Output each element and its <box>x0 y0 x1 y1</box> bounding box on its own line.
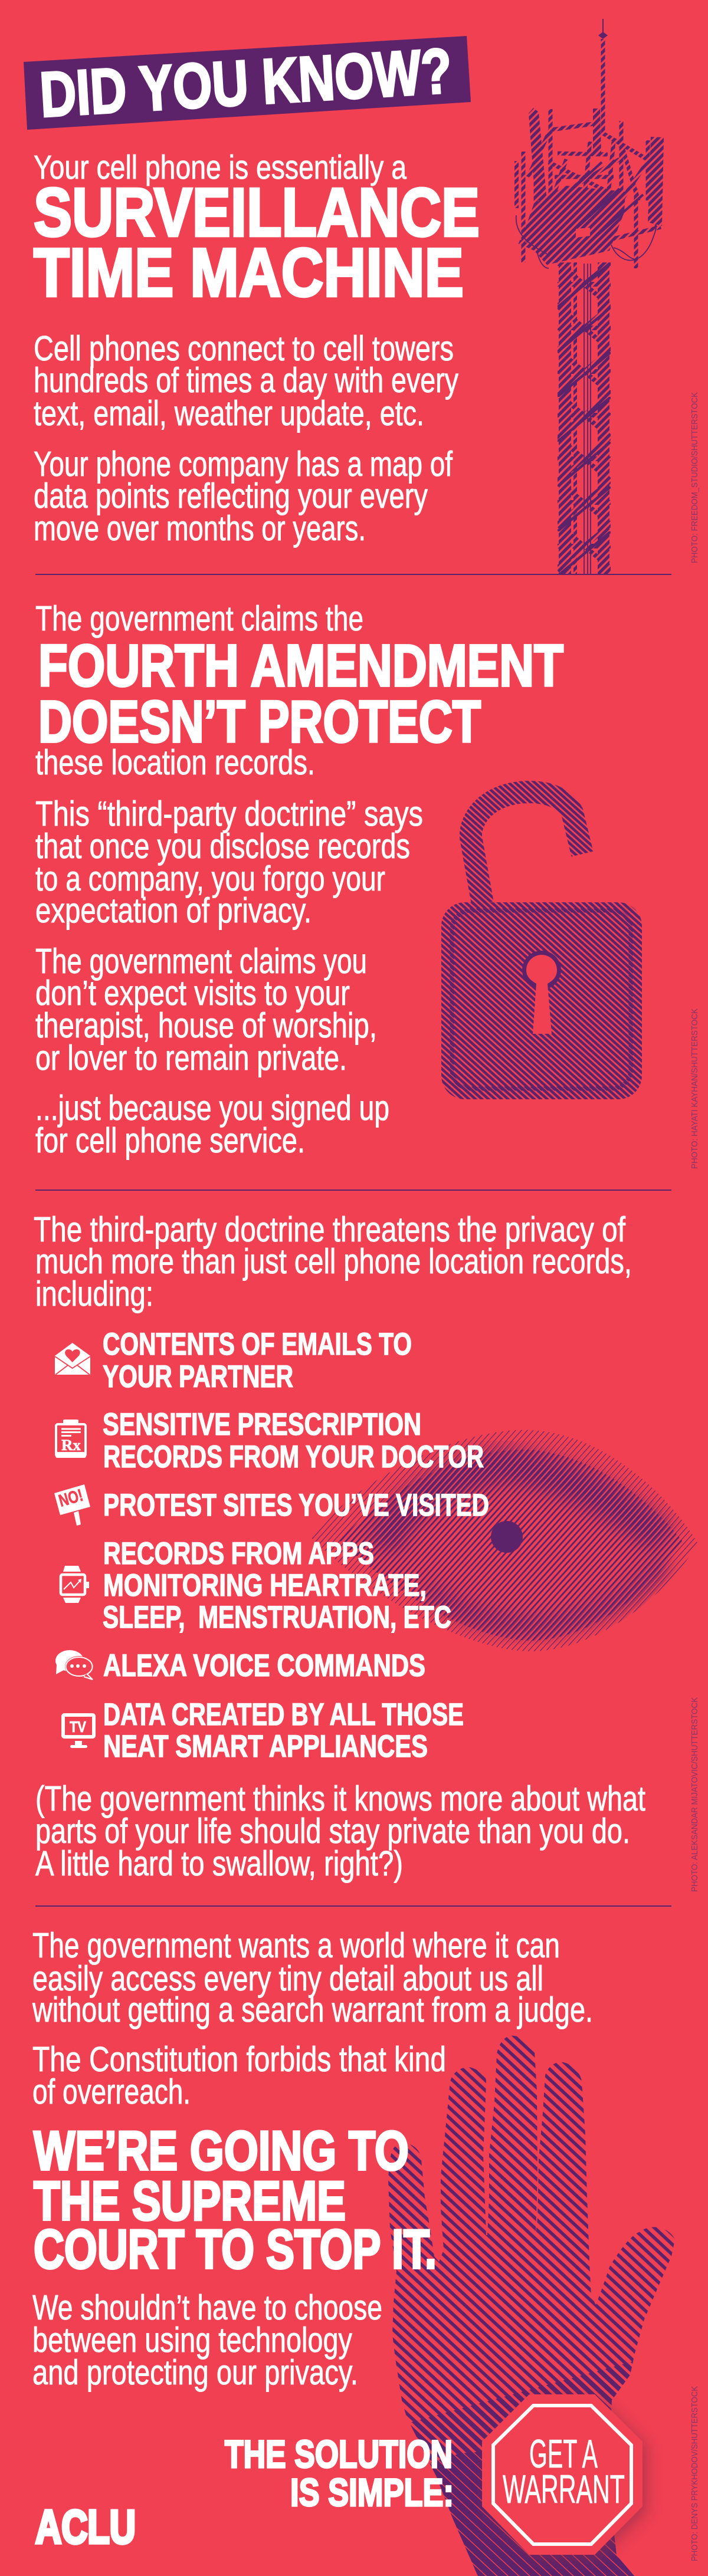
text: cell phones connect: Cell phones connect to cell towers <box>34 329 454 368</box>
text: third-party doctrine: to a company, you forgo your <box>35 859 385 898</box>
text: the solution is simple <box>225 2432 454 2514</box>
text: signed up: for cell phone service. <box>35 1121 305 1160</box>
illustration: eye <box>307 1427 702 1654</box>
list item: apps: SLEEP, MENSTRUATION, ETC <box>103 1600 451 1635</box>
text: hard to swallow: A little hard to swallow, right?) <box>35 1844 403 1883</box>
list item: appliances <box>63 1697 464 1764</box>
list item: alexa: ALEXA VOICE COMMANDS <box>103 1648 425 1683</box>
list item: apps: RECORDS FROM APPS <box>103 1536 374 1571</box>
text: phone company map: move over months or years. <box>34 509 366 548</box>
text: doctrine threatens: including: <box>35 1274 153 1313</box>
list item: appliances: DATA CREATED BY ALL THOSE <box>103 1697 464 1732</box>
list item: appliances: NEAT SMART APPLIANCES <box>103 1729 428 1764</box>
list item: apps <box>61 1536 451 1635</box>
heading: supreme court: WE’RE GOING TO <box>34 2120 409 2181</box>
stop sign: get a warrant: GET A <box>529 2432 598 2476</box>
list item: apps: MONITORING HEARTRATE, <box>103 1568 427 1603</box>
panel: supreme court <box>32 1926 700 2576</box>
panel: surveillance time machine <box>24 19 700 574</box>
text: third-party doctrine <box>35 794 423 930</box>
text: government claims you: therapist, house of worship, <box>35 1006 377 1045</box>
list item: emails: YOUR PARTNER <box>103 1359 293 1394</box>
photo credit: hand: PHOTO: DENYS PRYKHODOV/SHUTTERSTOCK <box>690 2386 700 2561</box>
text: constitution forbids: of overreach. <box>32 2072 191 2111</box>
photo credit: eye: PHOTO: ALEKSANDAR MIJATOVIC/SHUTTERSTOCK <box>690 1697 700 1892</box>
icon: smart tv <box>63 1715 94 1748</box>
text: technology and privacy: and protecting our privacy. <box>32 2353 358 2392</box>
stop sign: get a warrant <box>482 2394 647 2559</box>
heading: fourth amendment <box>38 633 563 755</box>
icon: prescription clipboard <box>55 1420 86 1458</box>
heading: supreme court: COURT TO STOP IT. <box>34 2218 437 2280</box>
list item: protest: PROTEST SITES YOU’VE VISITED <box>103 1488 489 1523</box>
list item: protest <box>54 1484 489 1526</box>
stop sign: get a warrant: WARRANT <box>503 2467 625 2512</box>
icon: chat bubbles <box>55 1650 93 1680</box>
list item: emails: CONTENTS OF EMAILS TO <box>103 1327 412 1362</box>
text: cell phones connect: hundreds of times a day with every <box>34 361 458 400</box>
text: technology and privacy <box>32 2288 382 2392</box>
illustration: raised hand <box>384 2029 684 2576</box>
photo credit: lock: PHOTO: HAYATI KAYHAN/SHUTTERSTOCK <box>690 1008 700 1169</box>
icon: prescription clipboard: Rx <box>61 1437 81 1454</box>
illustration: cell tower <box>514 19 664 574</box>
heading: fourth amendment: DOESN’T PROTECT <box>38 689 481 755</box>
panel: third-party doctrine threats <box>34 1210 702 1892</box>
text: third-party doctrine: This “third-party doctrine” says <box>35 794 423 833</box>
list item: emails <box>55 1327 412 1394</box>
icon: protest sign <box>54 1484 90 1526</box>
text: constitution forbids <box>32 2040 446 2111</box>
photo credit: tower: PHOTO: FREEDOM_STUDIO/SHUTTERSTOCK <box>690 392 700 563</box>
banner: did you know: DID YOU KNOW? <box>38 35 454 130</box>
panel: fourth amendment <box>35 599 700 1169</box>
text: government wants <box>32 1926 593 2029</box>
text: phone company map: data points reflecting your every <box>34 477 428 515</box>
heading: fourth amendment: FOURTH AMENDMENT <box>38 633 563 699</box>
heading: supreme court: THE SUPREME <box>34 2170 346 2232</box>
text: cell phones connect <box>34 329 458 433</box>
text: third-party doctrine: expectation of privacy. <box>35 891 312 930</box>
list item: prescriptions <box>55 1407 484 1474</box>
text: the solution is simple: THE SOLUTION <box>225 2432 453 2476</box>
text: intro line: Your cell phone is essentially a <box>34 149 407 186</box>
list item: prescriptions: SENSITIVE PRESCRIPTION <box>103 1407 421 1442</box>
text: phone company map <box>34 445 453 548</box>
text: third-party doctrine: that once you disclose records <box>35 827 410 866</box>
text: doctrine threatens <box>34 1210 632 1313</box>
heading: surveillance time machine <box>34 174 480 311</box>
text: government claims you: don’t expect visits to your <box>35 974 350 1013</box>
list item: prescriptions: RECORDS FROM YOUR DOCTOR <box>103 1440 484 1474</box>
text: government claims you: or lover to remain private. <box>35 1039 347 1077</box>
text: government claims you <box>35 942 377 1077</box>
heading: surveillance time machine: TIME MACHINE <box>34 234 464 311</box>
text: government claims: The government claims the <box>35 599 363 638</box>
icon: envelope with heart <box>55 1343 90 1375</box>
illustration: open padlock <box>441 792 642 1099</box>
icon: smart tv: TV <box>70 1718 87 1736</box>
text: government claims you: The government claims you <box>35 942 367 981</box>
text: cell phones connect: text, email, weather update, etc. <box>34 394 424 433</box>
text: government wants: easily access every tiny detail about us all <box>32 1959 543 1998</box>
text: signed up <box>35 1089 389 1160</box>
text: location records: these location records. <box>35 743 315 782</box>
text: technology and privacy: between using technology <box>32 2321 352 2360</box>
text: government wants: The government wants a world where it can <box>32 1926 560 1965</box>
icon: protest sign: NO! <box>57 1486 85 1511</box>
heading: surveillance time machine: SURVEILLANCE <box>34 174 480 251</box>
text: technology and privacy: We shouldn’t have to choose <box>32 2288 382 2327</box>
text: phone company map: Your phone company has a map of <box>34 445 453 484</box>
text: signed up: ...just because you signed up <box>35 1089 389 1128</box>
text: constitution forbids: The Constitution forbids that kind <box>32 2040 446 2079</box>
icon: smart watch <box>61 1566 89 1603</box>
heading: supreme court <box>34 2120 437 2280</box>
logo: ACLU: ACLU <box>35 2501 136 2553</box>
text: the solution is simple: IS SIMPLE: <box>290 2470 454 2514</box>
text: hard to swallow <box>35 1779 645 1883</box>
